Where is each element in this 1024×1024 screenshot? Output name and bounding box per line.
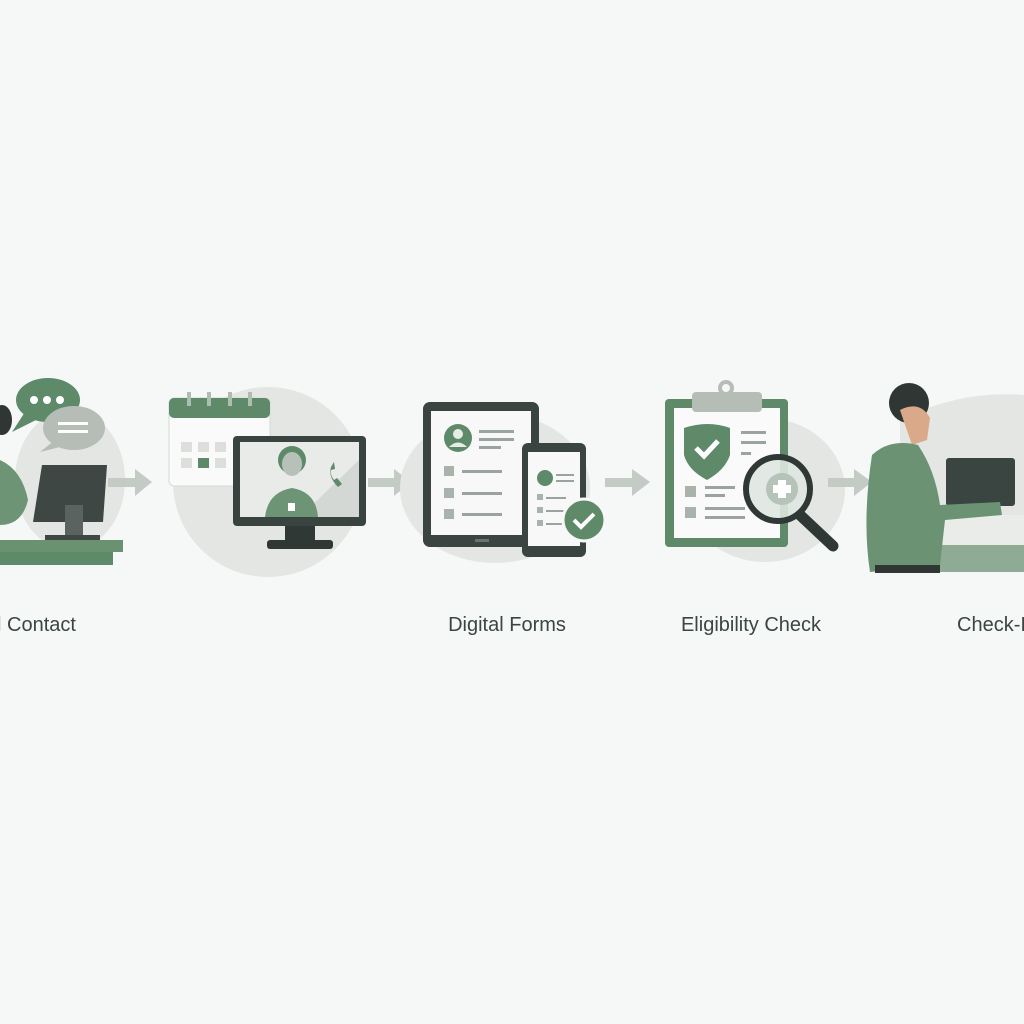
arrow 3 <box>605 469 650 496</box>
step 4: eligibility check illustration <box>665 382 845 562</box>
person <box>866 383 1002 573</box>
desk <box>0 540 123 565</box>
person <box>0 405 28 525</box>
step 5: check-in illustration <box>866 383 1024 573</box>
icon: check badge <box>563 499 605 541</box>
label: digital forms: Digital Forms <box>448 614 566 636</box>
monitor <box>33 465 107 540</box>
step 3: digital forms illustration <box>400 402 605 563</box>
icon: speech bubble dots <box>12 378 80 432</box>
icon: calendar <box>169 392 270 486</box>
icon: magnifier <box>746 457 833 546</box>
arrow 2 <box>368 469 411 496</box>
step 2: scheduling illustration <box>169 387 366 577</box>
arrow 4 <box>828 469 872 496</box>
icon: speech bubble lines <box>40 406 105 452</box>
icon: video call monitor <box>233 436 366 549</box>
step 1: initial contact illustration <box>0 378 125 565</box>
icon: clipboard <box>665 382 788 547</box>
desk <box>935 515 1024 572</box>
label: eligibility check: Eligibility Check <box>681 614 822 636</box>
monitor <box>946 458 1015 516</box>
arrow 1 <box>108 469 152 496</box>
icon: phone form <box>522 443 586 557</box>
icon: tablet form <box>423 402 539 547</box>
